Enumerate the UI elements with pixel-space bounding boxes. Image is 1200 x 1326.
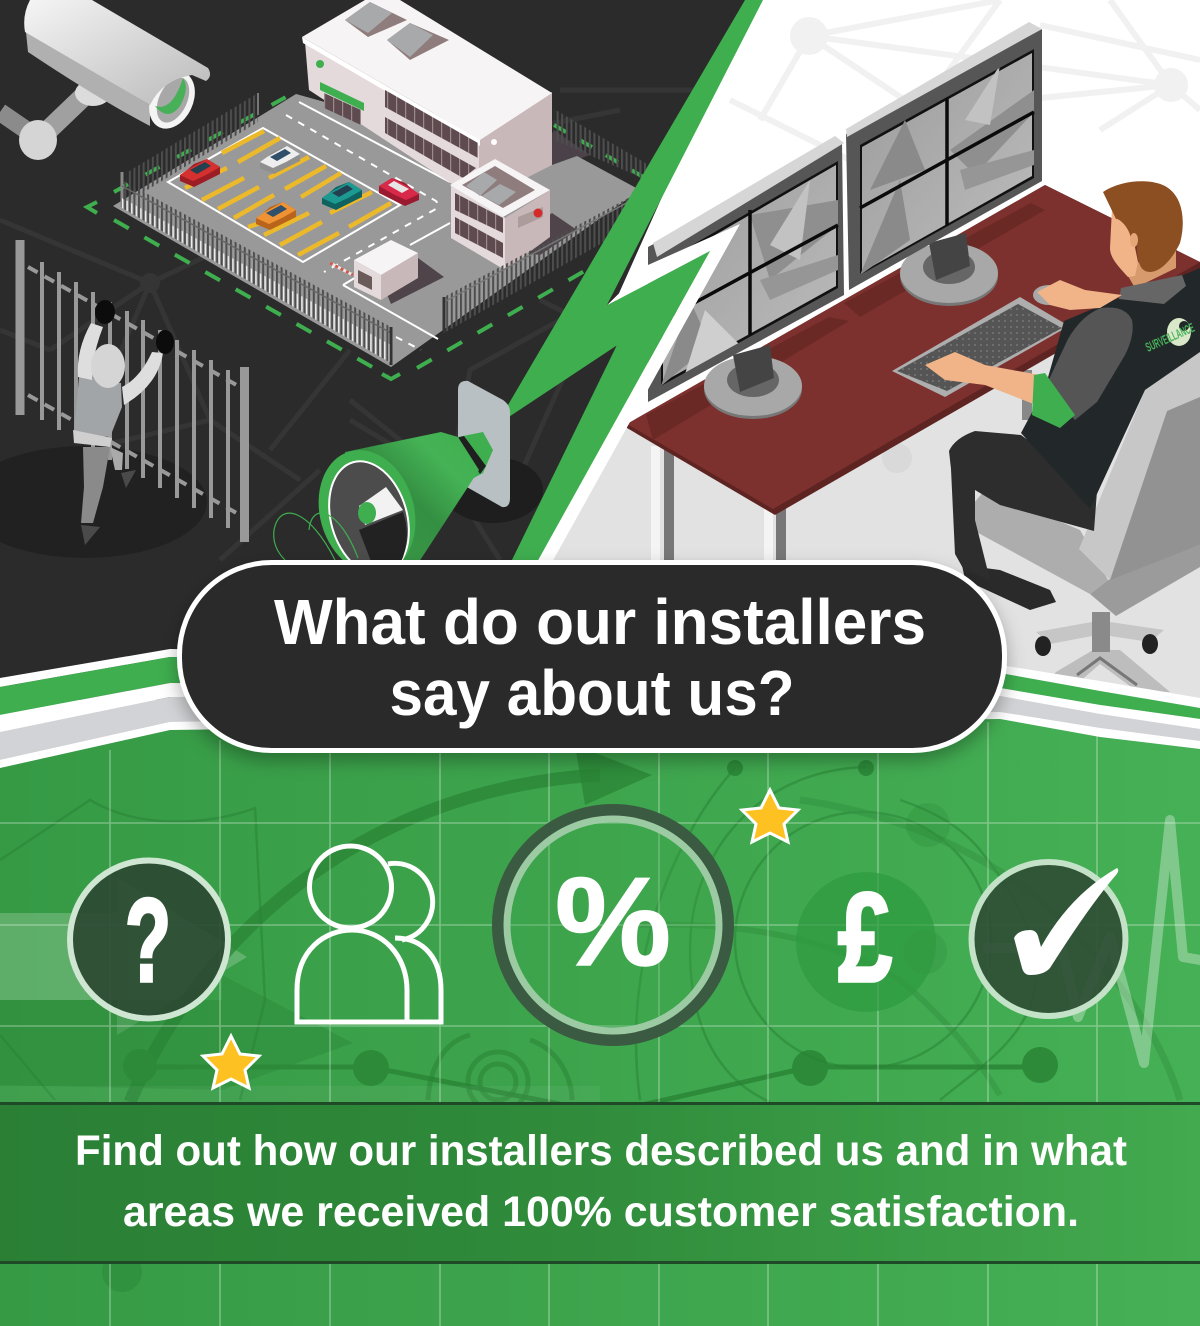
front fence bottom right — [444, 196, 632, 333]
monitor stand right — [900, 233, 998, 306]
solar panels — [345, 2, 407, 37]
thin outline arcs — [0, 767, 1180, 1102]
operator hair — [1103, 181, 1183, 272]
site ground — [113, 94, 640, 367]
circuit nodes — [102, 760, 1058, 1292]
third white stripe — [0, 712, 1200, 768]
yellow parking bays — [185, 131, 391, 255]
operator neck — [1128, 248, 1176, 288]
dark lower arrow — [0, 975, 353, 1090]
light network pattern on wall — [730, 0, 1200, 473]
shadow — [0, 446, 207, 558]
monitor right — [846, 22, 1042, 290]
caption text: areas we received 100% customer satisfaction. — [123, 1188, 1079, 1236]
icon: percent circle — [498, 810, 728, 1040]
top white stripe — [0, 649, 1200, 708]
wall camera — [316, 60, 324, 68]
icon: question mark circle: ? — [125, 875, 171, 1007]
green cuff — [1032, 373, 1075, 428]
gate — [20, 240, 244, 542]
car: white — [260, 146, 300, 174]
icon: check mark circle — [972, 862, 1126, 1016]
car: teal — [322, 182, 362, 210]
green stripe — [0, 657, 1200, 719]
operator ear — [1130, 233, 1138, 247]
small office building — [450, 159, 550, 270]
grid lines — [0, 722, 1200, 1326]
illustration: intruder climbing gate — [0, 240, 244, 558]
caption text — [75, 1127, 1127, 1236]
monitor left — [648, 136, 844, 402]
panel: light room background — [0, 0, 1200, 780]
green background — [0, 719, 1200, 1326]
top-left fence — [122, 93, 258, 207]
decorative background graphics — [0, 722, 1200, 1326]
near forearm and hand — [925, 352, 1040, 405]
title text — [274, 586, 926, 729]
floor of the monitoring room — [540, 250, 1200, 780]
entrance — [324, 93, 361, 125]
ground shadow behind buildings — [527, 130, 590, 178]
green perimeter dashes — [87, 92, 645, 379]
green awning — [320, 82, 364, 111]
icon: two people — [297, 846, 441, 1022]
main building — [302, 0, 552, 202]
operator shoe — [962, 565, 1056, 610]
icon: star bottom left — [203, 1036, 259, 1088]
lightning bolt green — [496, 0, 763, 564]
icon: question mark circle — [70, 860, 228, 1018]
monitor stand left — [704, 345, 802, 419]
front fence bottom left — [122, 180, 391, 365]
sleeve — [1045, 308, 1133, 420]
desk top — [627, 185, 1200, 515]
illustration: monitoring desk — [627, 22, 1200, 560]
operator trousers — [949, 431, 1097, 580]
operator vest — [1021, 268, 1200, 509]
mouse — [1033, 285, 1065, 305]
title text: say about us? — [390, 657, 794, 729]
caption bar — [0, 1102, 1200, 1264]
icon: percent circle: % — [555, 851, 671, 992]
chair back and seat — [971, 352, 1200, 616]
panel: dark security scene background — [0, 0, 750, 700]
icon: pound sign: £ — [838, 867, 892, 1008]
spiral target — [428, 1035, 572, 1112]
car: red — [180, 159, 220, 187]
road markings — [168, 102, 450, 350]
second white stripe — [0, 683, 1200, 732]
illustration: operator on chair — [925, 181, 1200, 692]
curved dark arrow — [130, 775, 600, 1102]
dark network pattern — [0, 90, 700, 560]
chair base — [1035, 612, 1170, 692]
icon: security camera — [0, 0, 210, 160]
car: crimson — [379, 178, 419, 206]
lightning bolt white outline — [536, 224, 740, 564]
far arm — [1037, 280, 1122, 310]
operator face — [1110, 208, 1138, 277]
icon: pound sign — [796, 867, 936, 1012]
building shadows — [505, 213, 577, 255]
caption text: Find out how our installers described us and in what — [75, 1127, 1127, 1175]
translucent left arrow — [0, 877, 247, 1035]
collar — [1119, 275, 1186, 304]
intruder figure — [73, 300, 174, 545]
car: orange — [256, 202, 296, 230]
icon: star top right — [742, 790, 798, 842]
panel: green lower section — [0, 649, 1200, 1326]
guard booth — [330, 240, 418, 300]
title text: What do our installers — [274, 586, 926, 658]
grey stripe — [0, 696, 1200, 760]
vest logo — [1143, 318, 1197, 355]
title pill — [180, 562, 1004, 750]
ECG line — [987, 820, 1200, 1063]
illustration: secured site isometric — [87, 0, 647, 379]
top-right fence — [554, 109, 647, 180]
keyboard — [892, 297, 1069, 397]
desk legs — [651, 370, 1032, 560]
icon: megaphone — [274, 381, 543, 586]
